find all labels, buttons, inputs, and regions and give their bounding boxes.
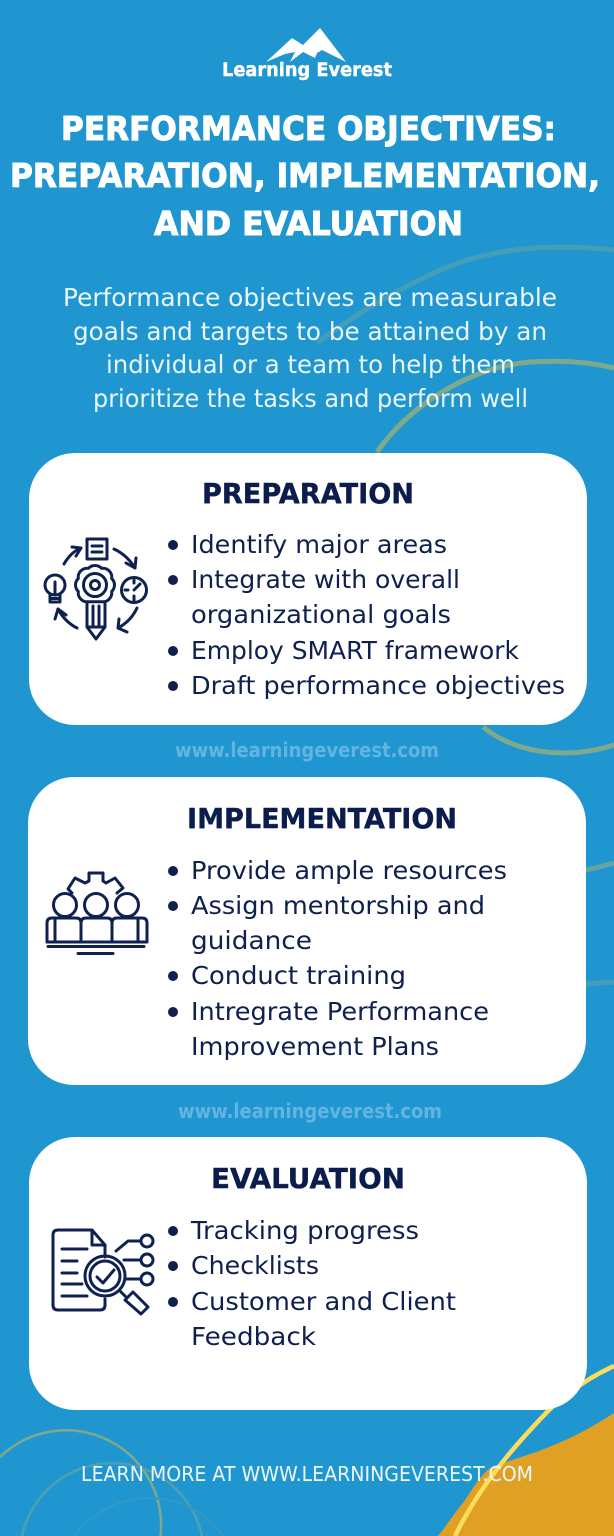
bullet list: evaluation: Checklists [191,1251,319,1280]
logo wordmark: Learning Everest [222,59,392,81]
heading: evaluation: EVALUATION [211,1162,405,1195]
yellow curved line [455,1366,614,1536]
bullet list: implementation [168,856,507,1061]
bullet list: implementation: Intregrate Performance [191,997,489,1026]
title [10,109,600,243]
bullet list: preparation: Employ SMART framework [191,636,520,665]
bullet list: implementation: Provide ample resources [191,856,507,885]
intro text: prioritize the tasks and perform well [93,384,528,413]
panel: implementation [28,777,586,1085]
logo mountains [266,28,346,62]
bullet list: implementation: guidance [191,926,312,955]
bullet list: preparation: Draft performance objectives [191,671,565,700]
bullet list: evaluation: Feedback [191,1322,317,1351]
bullet list: preparation [168,530,565,700]
title: PERFORMANCE OBJECTIVES: [61,109,556,148]
bullet list: evaluation [168,1216,456,1351]
bullet list: implementation: Assign mentorship and [191,891,485,920]
heading: implementation: IMPLEMENTATION [187,802,457,835]
logo [222,28,392,81]
icon: document review with magnifier [53,1230,153,1314]
panel: preparation [29,453,587,725]
bullet list: preparation: organizational goals [191,600,451,629]
intro text [63,283,557,413]
bullet list: evaluation: Customer and Client [191,1287,456,1316]
intro text: goals and targets to be attained by an [73,317,547,346]
intro text: Performance objectives are measurable [63,283,557,312]
intro text: individual or a team to help them [106,350,515,379]
watermark 1: www.learningeverest.com [175,738,439,762]
background rings: upper right [317,247,614,984]
bullet list: implementation: Conduct training [191,961,406,990]
heading: preparation: PREPARATION [202,477,414,510]
bullet list: implementation: Improvement Plans [191,1032,439,1061]
footer call to action: LEARN MORE AT WWW.LEARNINGEVEREST.COM [81,1462,533,1486]
panel: evaluation [29,1137,587,1410]
title: AND EVALUATION [154,204,463,243]
icon: planning cycle with gear and pencil [45,539,146,639]
bullet list: evaluation: Tracking progress [190,1216,419,1245]
orange corner shape [438,1413,614,1536]
background rings: lower left [0,1430,224,1536]
bullet list: preparation: Integrate with overall [191,565,460,594]
icon: team with gear [47,873,147,954]
bullet list: preparation: Identify major areas [191,530,447,559]
watermark 2: www.learningeverest.com [178,1099,442,1123]
